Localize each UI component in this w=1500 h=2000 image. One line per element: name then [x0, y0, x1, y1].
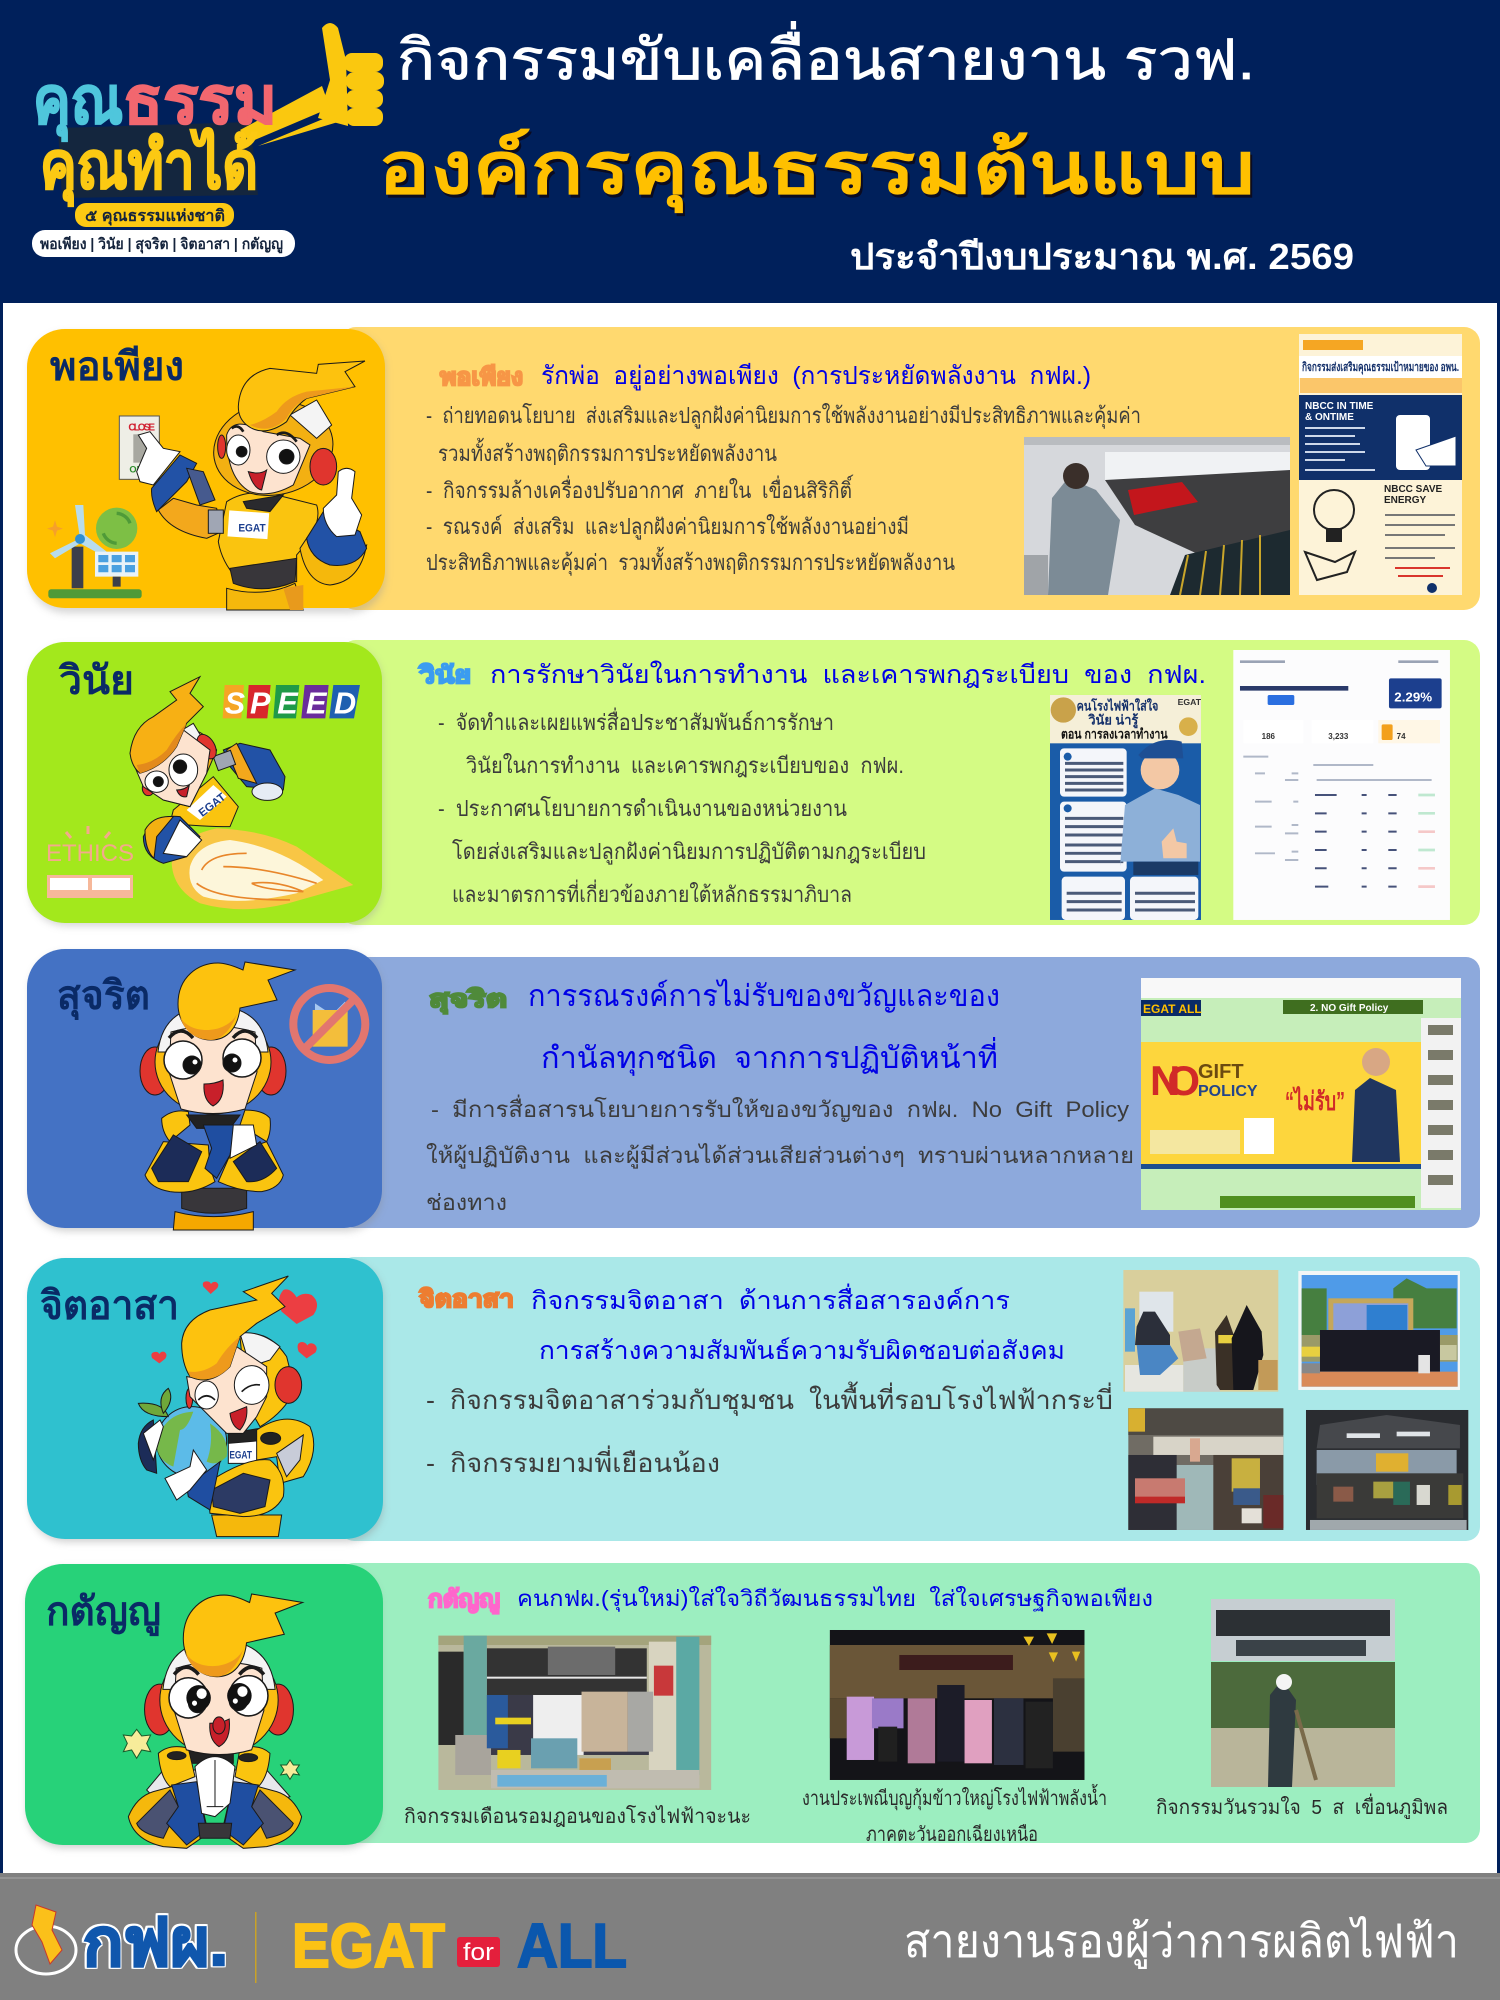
heading: จิตอาสา	[40, 1284, 179, 1328]
icon: no gift	[293, 988, 365, 1060]
icon: thumbs up	[240, 23, 384, 146]
icon: close switch: OFF	[129, 464, 148, 474]
poster: energy saving: NBCC SAVE	[1384, 484, 1442, 495]
activity text: - มีการสื่อสารนโยบายการรับให้ของขวัญของ กฟผ. No Gift Policy	[431, 1094, 1129, 1122]
mascot: EGAT	[229, 1449, 252, 1461]
photo: group at stage	[1298, 1271, 1460, 1390]
mascot head	[145, 1594, 303, 1755]
activity text: การสร้างความสัมพันธ์ความรับผิดชอบต่อสังคม	[539, 1337, 1065, 1365]
poster: energy saving: & ONTIME	[1305, 412, 1354, 423]
panel: พอเพียง	[27, 327, 1480, 613]
fiscal year subtitle: ประจำปีงบประมาณ พ.ศ. 2569	[850, 236, 1354, 277]
photo: big group in hall	[1306, 1410, 1468, 1530]
screenshot: no gift policy: GIFT	[1198, 1061, 1244, 1083]
photo: rice merit festival	[830, 1630, 1084, 1780]
poster: time attendance: คนโรงไฟฟ้าใส่ใจ	[1077, 698, 1158, 714]
poster: energy saving	[1299, 334, 1462, 595]
screenshot: no gift policy: POLICY	[1198, 1083, 1258, 1100]
activity text	[426, 978, 1134, 1215]
caption: กิจกรรมวันรวมใจ 5 ส เขื่อนภูมิพล	[1156, 1793, 1448, 1820]
photo: cleaning air conditioner	[1024, 437, 1290, 595]
egat emblem	[16, 1905, 76, 1974]
egat for all logo: ALL	[517, 1912, 627, 1981]
activity text: โดยส่งเสริมและปลูกฝังค่านิยมการปฏิบัติตามกฎระเบียบ	[452, 839, 926, 865]
dashboard screenshot: 3,233	[1328, 732, 1349, 741]
icon: close switch: CLOSE	[128, 423, 155, 434]
mascot: EGAT	[238, 523, 266, 535]
egat thai name: กฟผ.	[83, 1905, 228, 1979]
panel: กตัญญู	[25, 1563, 1480, 1848]
poster: energy saving: NBCC IN TIME	[1305, 401, 1374, 412]
icon: stars	[123, 1729, 299, 1779]
poster: energy saving: ENERGY	[1384, 495, 1427, 506]
campaign logo: ธรรม	[123, 63, 277, 137]
title line 1: กิจกรรมขับเคลื่อนสายงาน รวฟ.	[397, 21, 1255, 91]
activity text: และมาตรการที่เกี่ยวข้องภายใต้หลักธรรมาภิบาล	[452, 879, 852, 907]
activity text: คนกฟผ.(รุ่นใหม่)ใส่ใจวิถีวัฒนธรรมไทย ใส่ใจเศรษฐกิจพอเพียง	[517, 1586, 1153, 1612]
mascot	[137, 361, 367, 610]
activity text: - ประกาศนโยบายการดำเนินงานของหน่วยงาน	[438, 796, 847, 821]
activity text: ให้ผู้ปฏิบัติงาน และผู้มีส่วนได้ส่วนเสียส่วนต่างๆ ทราบผ่านหลากหลาย	[426, 1143, 1134, 1169]
dashboard screenshot: 2.29%	[1394, 690, 1432, 705]
mascot: EGAT	[197, 791, 228, 820]
campaign logo	[32, 23, 384, 257]
activity text: ช่องทาง	[426, 1190, 507, 1215]
activity text: - ถ่ายทอดนโยบาย ส่งเสริมและปลูกฝังค่านิยมการใช้พลังงานอย่างมีประสิทธิภาพและคุ้มค่า	[426, 403, 1141, 429]
icon: ethics book	[46, 826, 134, 898]
screenshot: no gift policy	[1141, 978, 1461, 1210]
campaign logo: คุณ	[33, 63, 123, 142]
icon: wind and solar	[47, 505, 142, 598]
division name: สายงานรองผู้ว่าการผลิตไฟฟ้า	[904, 1915, 1459, 1969]
mascot head	[140, 962, 295, 1114]
activity text: รักพ่อ อยู่อย่างพอเพียง (การประหยัดพลังงาน กฟผ.)	[541, 362, 1091, 391]
activity text: - กิจกรรมจิตอาสาร่วมกับชุมชน ในพื้นที่รอบโรงไฟฟ้ากระบี่	[426, 1381, 1113, 1416]
title line 2: องค์กรคุณธรรมต้นแบบ	[378, 128, 1255, 214]
screenshot: no gift policy: “ไม่รับ”	[1285, 1085, 1345, 1116]
heading: กตัญญู	[46, 1590, 161, 1636]
header banner	[0, 0, 1500, 303]
icon: speed tiles: SPEED	[225, 686, 356, 720]
campaign logo: คุณทำได้	[40, 127, 258, 207]
poster: time attendance: EGAT	[1178, 697, 1202, 707]
caption: กิจกรรมเดือนรอมฎอนของโรงไฟฟ้าจะนะ	[404, 1805, 751, 1828]
activity text	[426, 362, 1141, 576]
activity text: - กิจกรรมล้างเครื่องปรับอากาศ ภายใน เขื่อนสิริกิติ์	[426, 475, 854, 503]
mascot	[130, 677, 353, 909]
activity text: จิตอาสา	[419, 1286, 514, 1313]
activity text	[418, 660, 1206, 907]
activity text	[419, 1283, 1113, 1478]
caption: ภาคตะวันออกเฉียงเหนือ	[866, 1824, 1038, 1846]
icon: hearts	[151, 1281, 317, 1363]
caption: งานประเพณีบุญกุ้มข้าวใหญ่โรงไฟฟ้าพลังน้ำ	[802, 1784, 1107, 1811]
egat for all logo	[292, 1912, 627, 1981]
activity text: - จัดทำและเผยแพร่สื่อประชาสัมพันธ์การรักษา	[438, 707, 834, 735]
page background	[0, 303, 1500, 1873]
activity text: กตัญญู	[428, 1586, 500, 1614]
photo: community meeting	[1128, 1408, 1283, 1530]
mascot	[138, 1276, 314, 1537]
activity text: วินัยในการทำงาน และเคารพกฎระเบียบของ กฟผ.	[465, 753, 904, 778]
footer	[0, 1873, 1500, 2000]
activity text: กิจกรรมจิตอาสา ด้านการสื่อสารองค์การ	[531, 1283, 1010, 1315]
photo: ramadan activity	[438, 1636, 711, 1790]
dashboard screenshot: 74	[1397, 732, 1406, 741]
egat for all logo: for	[463, 1939, 494, 1966]
activity text: การรณรงค์การไม่รับของขวัญและของ	[528, 978, 1000, 1013]
activity text: - รณรงค์ ส่งเสริม และปลูกฝังค่านิยมการใช้พลังงานอย่างมี	[426, 514, 909, 540]
photo: group and sweeping	[1211, 1599, 1395, 1787]
poster: time attendance: ตอน การลงเวลาทำงาน	[1061, 726, 1168, 741]
icon: ethics book: ETHICS	[46, 840, 134, 867]
panel: สุจริต	[27, 949, 1480, 1231]
heading: วินัย	[58, 659, 134, 703]
heading: พอเพียง	[50, 345, 184, 389]
activity text: กำนัลทุกชนิด จากการปฏิบัติหน้าที่	[541, 1037, 998, 1077]
activity text: การรักษาวินัยในการทำงาน และเคารพกฎระเบียบ ของ กฟผ.	[490, 660, 1206, 689]
heading: สุจริต	[57, 974, 150, 1021]
campaign logo: พอเพียง | วินัย | สุจริต | จิตอาสา | กตัญญู	[40, 235, 283, 254]
mascot	[145, 1110, 283, 1230]
dashboard screenshot	[1233, 650, 1450, 920]
activity text: พอเพียง	[440, 364, 523, 391]
icon: close switch	[119, 416, 159, 479]
activity text: - กิจกรรมยามพี่เยือนน้อง	[426, 1445, 720, 1478]
screenshot: no gift policy: 2. NO Gift Policy	[1310, 1003, 1389, 1014]
panel: วินัย	[27, 640, 1480, 926]
activity text: สุจริต	[429, 986, 507, 1015]
photo: hospital visit	[1123, 1270, 1278, 1392]
poster: time attendance: วินัย น่ารู้	[1088, 712, 1139, 728]
dashboard screenshot: 186	[1262, 732, 1276, 741]
activity text: รวมทั้งสร้างพฤติกรรมการประหยัดพลังงาน	[438, 438, 777, 466]
egat for all logo: EGAT	[292, 1912, 445, 1981]
campaign logo: ๕ คุณธรรมแห่งชาติ	[85, 207, 225, 226]
activity text: ประสิทธิภาพและคุ้มค่า รวมทั้งสร้างพฤติกรรมการประหยัดพลังงาน	[426, 547, 955, 576]
activity text: วินัย	[418, 662, 471, 689]
mascot	[128, 1747, 302, 1848]
panel: จิตอาสา	[27, 1257, 1480, 1542]
poster: time attendance	[1050, 695, 1202, 920]
screenshot: no gift policy: NO	[1150, 1057, 1200, 1104]
screenshot: no gift policy: EGAT ALL	[1143, 1002, 1202, 1016]
